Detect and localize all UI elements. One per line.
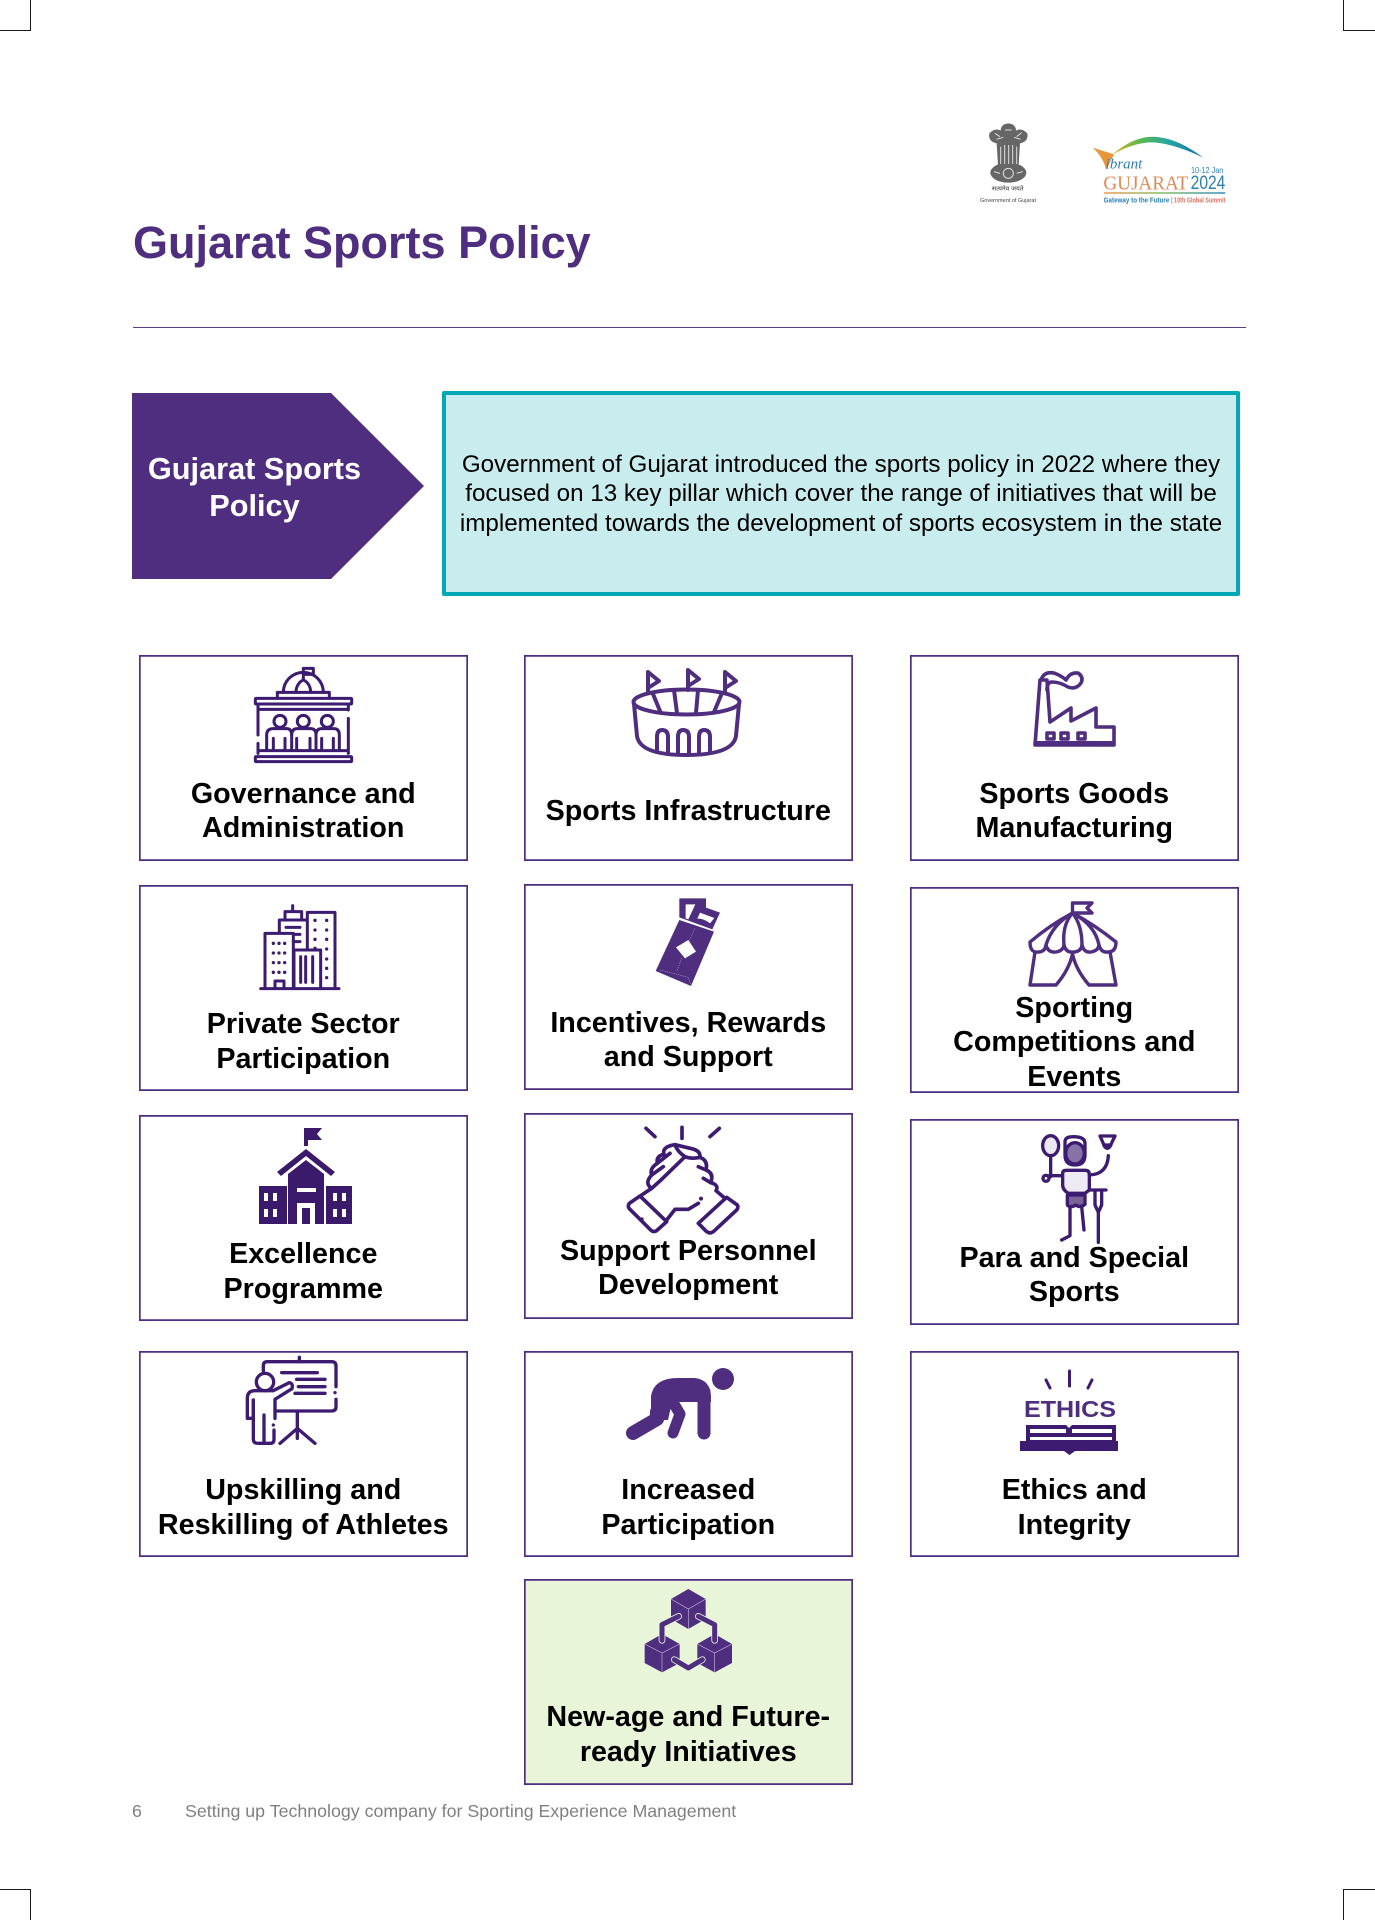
label <box>560 1235 817 1301</box>
label: Support Personnel <box>560 1235 817 1267</box>
panel: Governance and Administration <box>138 655 468 861</box>
label: Integrity <box>1018 1509 1131 1541</box>
icon: ethics book <box>1020 1370 1118 1455</box>
icon: sprinter at start <box>626 1368 734 1440</box>
label <box>546 1701 830 1768</box>
label: Governance and <box>191 778 416 810</box>
icon: reward envelope <box>656 898 720 986</box>
panel: New-age and Future-ready Initiatives <box>524 1579 853 1785</box>
label: ready Initiatives <box>580 1736 797 1768</box>
label <box>601 1474 775 1541</box>
logo: Government of Gujarat emblem: Government of Gujarat <box>980 198 1036 204</box>
label: Manufacturing <box>975 812 1173 844</box>
logo: Vibrant Gujarat 2024 <box>1092 136 1226 205</box>
logo: Government of Gujarat emblem <box>980 123 1036 204</box>
logo: Vibrant Gujarat 2024: Gateway to the Future <box>1104 198 1169 205</box>
label: Events <box>1027 1061 1121 1093</box>
icon: ethics book: ETHICS <box>1024 1396 1116 1422</box>
label: Sports Infrastructure <box>546 795 831 827</box>
intro callout box <box>442 391 1240 596</box>
logo: Vibrant Gujarat 2024: 10-12 Jan <box>1191 166 1223 175</box>
intro callout box: Government of Gujarat introduced the sports policy in 2022 where they <box>462 451 1220 478</box>
arrow banner: Gujarat Sports Policy: Policy <box>209 488 300 523</box>
icon: para athlete <box>1041 1134 1117 1244</box>
panel: Incentives, Rewards and Support <box>524 884 853 1090</box>
icon: clasped hands <box>626 1126 740 1235</box>
label <box>550 1007 826 1073</box>
arrow banner: Gujarat Sports Policy: Gujarat Sports <box>148 451 361 486</box>
icon: school building <box>259 1128 352 1224</box>
label: Participation <box>216 1043 390 1075</box>
logo: Vibrant Gujarat 2024: 2024 <box>1191 173 1226 194</box>
label: Competitions and <box>953 1026 1195 1058</box>
label: Private Sector <box>207 1008 400 1040</box>
icon: connected cubes <box>644 1589 732 1672</box>
panel: Upskilling and Reskilling of Athletes <box>138 1351 468 1557</box>
label: Development <box>598 1269 778 1301</box>
icon: tent <box>1028 901 1118 987</box>
icon: government building <box>254 666 354 764</box>
label <box>191 778 416 844</box>
icon: presenter at board <box>246 1356 338 1446</box>
label: Increased <box>621 1474 755 1506</box>
title: Gujarat Sports Policy <box>133 217 591 268</box>
panel: Increased Participation <box>524 1351 853 1557</box>
panel: Ethics and Integrity <box>910 1351 1239 1557</box>
intro callout box: implemented towards the development of sports ecosystem in the state <box>460 510 1222 537</box>
logo: Government of Gujarat emblem: सत्यमेव जयते <box>992 185 1024 193</box>
label <box>224 1238 383 1305</box>
panel: Private Sector Participation <box>138 885 468 1091</box>
icon: stadium <box>632 668 742 757</box>
label: Participation <box>601 1509 775 1541</box>
logo: Vibrant Gujarat 2024: GUJARAT <box>1103 172 1188 194</box>
panel: Sports Infrastructure <box>524 655 853 861</box>
icon: city buildings <box>259 904 341 990</box>
label <box>158 1474 449 1541</box>
label: Incentives, Rewards <box>550 1007 826 1039</box>
panel: Excellence Programme <box>138 1115 468 1321</box>
label <box>207 1008 400 1075</box>
label <box>959 1242 1189 1308</box>
label: Ethics and <box>1002 1474 1147 1506</box>
label: Upskilling and <box>205 1474 401 1506</box>
arrow banner: Gujarat Sports Policy <box>132 393 424 579</box>
panel: Sports Goods Manufacturing <box>910 655 1239 861</box>
logo: Vibrant Gujarat 2024: ibrant <box>1106 157 1143 173</box>
label <box>975 778 1173 844</box>
intro callout box: focused on 13 key pillar which cover the range of initiatives that will be <box>465 480 1217 507</box>
panel: Support Personnel Development <box>524 1113 853 1319</box>
label <box>953 992 1195 1093</box>
label: Para and Special <box>959 1242 1189 1274</box>
label <box>1002 1474 1147 1541</box>
label: Sporting <box>1015 992 1133 1024</box>
label: Reskilling of Athletes <box>158 1509 449 1541</box>
panel: Para and Special Sports <box>910 1119 1239 1325</box>
label: Sports Goods <box>979 778 1169 810</box>
footer: 6 <box>132 1801 142 1821</box>
icon: factory <box>1033 670 1116 747</box>
label: Administration <box>202 812 404 844</box>
label: Sports <box>1029 1276 1120 1308</box>
label: Excellence <box>229 1238 377 1270</box>
label: and Support <box>604 1041 773 1073</box>
label: New-age and Future- <box>546 1701 830 1733</box>
footer: Setting up Technology company for Sporting Experience Management <box>185 1801 736 1821</box>
label: Programme <box>224 1273 383 1305</box>
panel: Sporting Competitions and Events <box>910 887 1239 1093</box>
